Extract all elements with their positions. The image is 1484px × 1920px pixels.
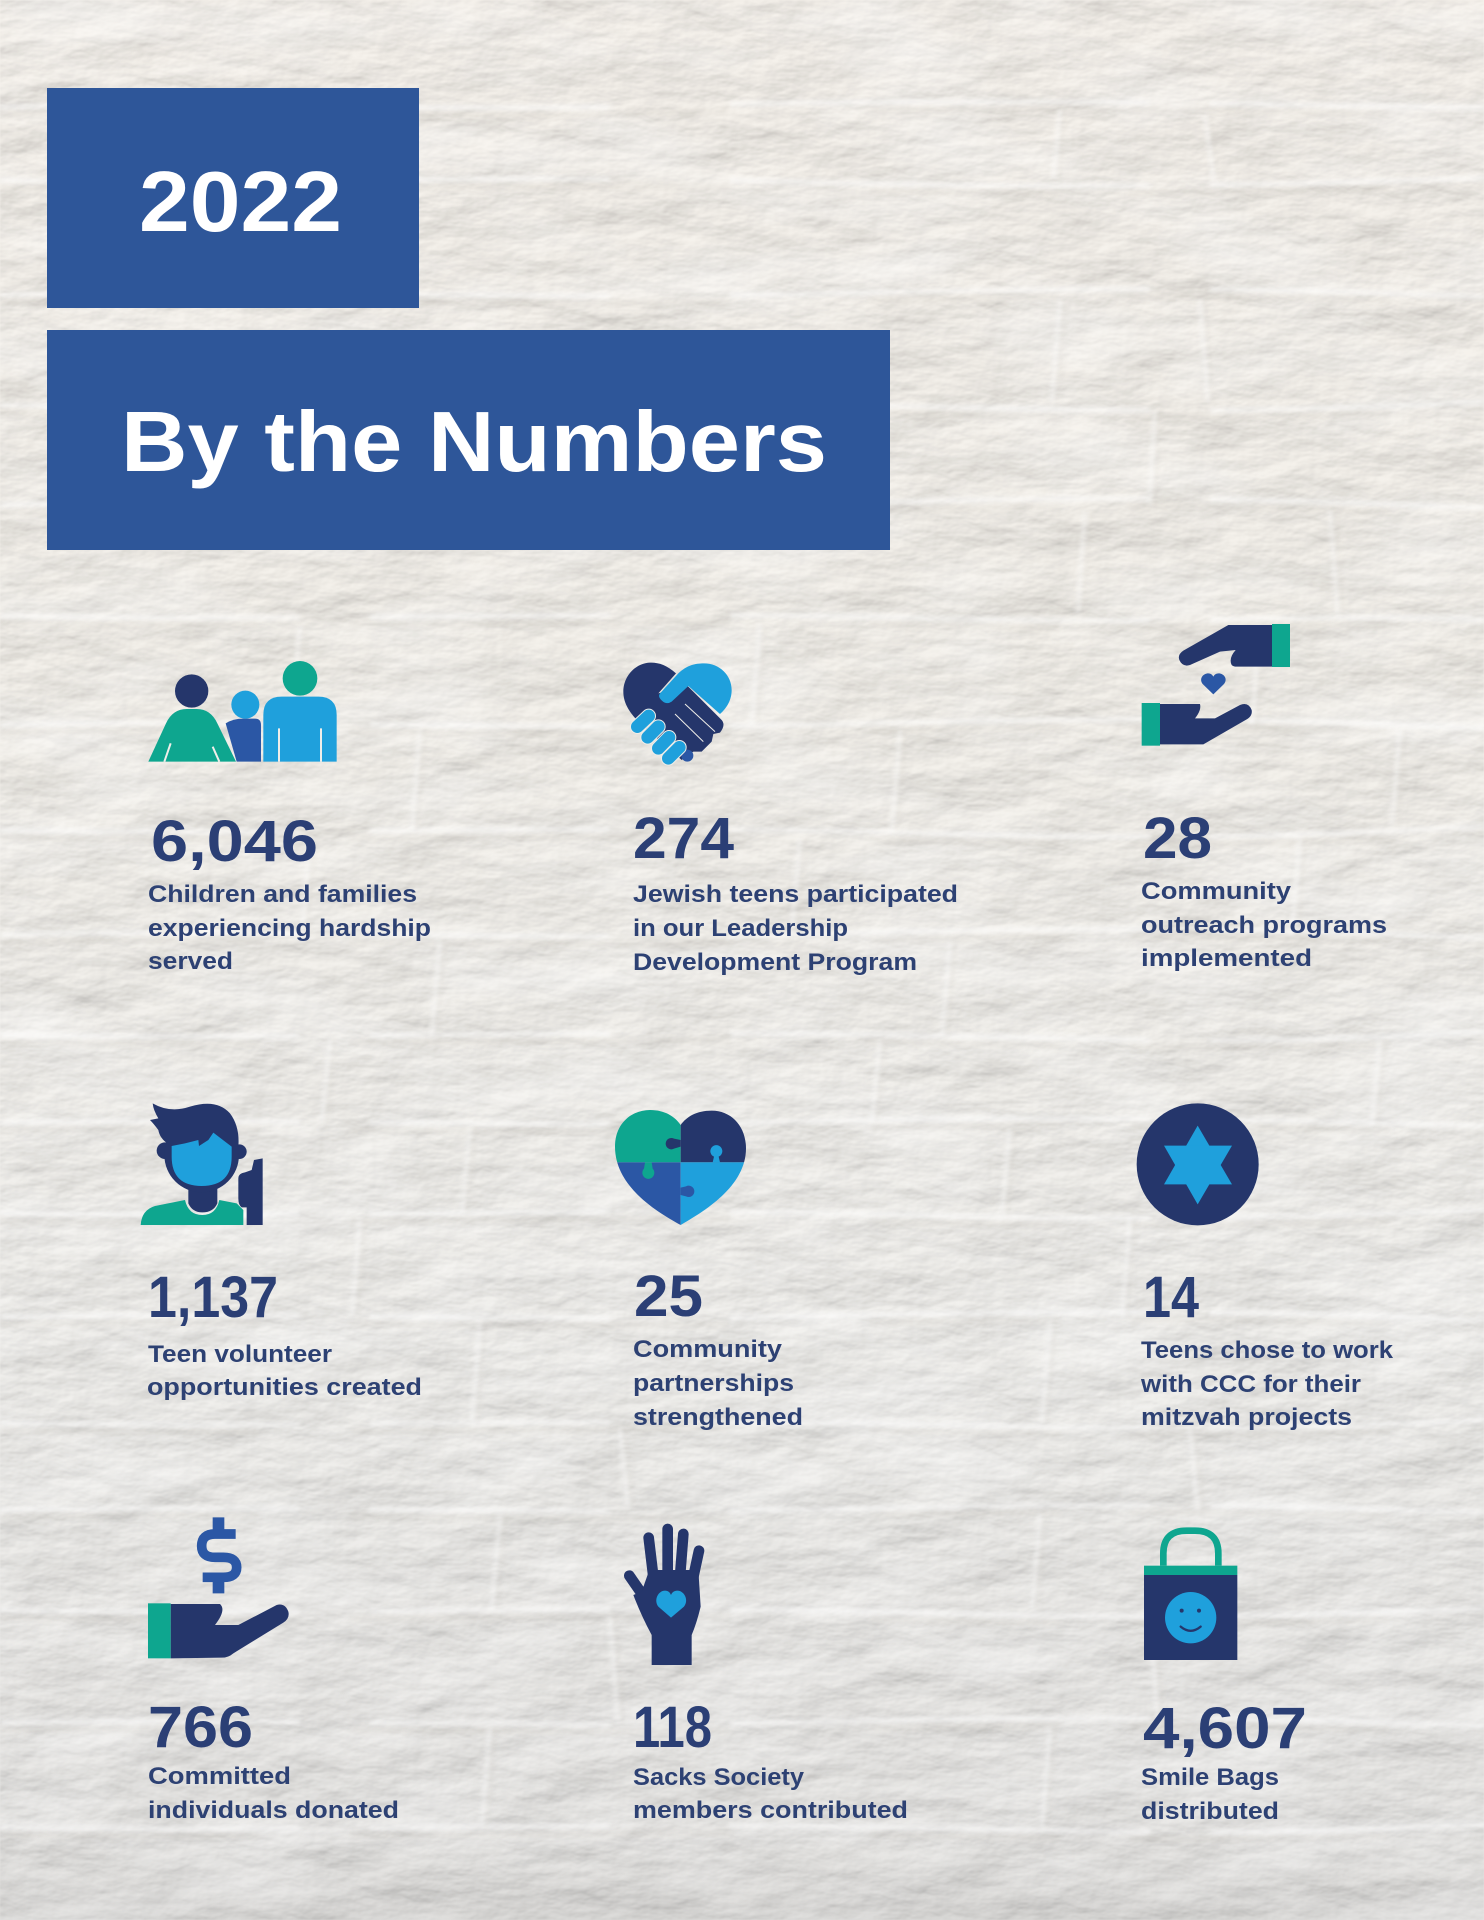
description: Community xyxy=(633,1336,783,1363)
stat: smile bags xyxy=(1141,1531,1307,1825)
number: 6,046: 6,046 xyxy=(151,809,318,874)
description xyxy=(147,1341,422,1401)
title box: 2022: 2022 xyxy=(139,155,342,250)
stat: children and families xyxy=(148,661,431,975)
icon: smile bag xyxy=(1144,1531,1237,1660)
description: members contributed xyxy=(633,1797,908,1824)
description: Smile Bags xyxy=(1141,1764,1279,1791)
stat: sacks society xyxy=(629,1529,908,1824)
description xyxy=(1141,1764,1279,1825)
description xyxy=(1140,1337,1394,1431)
description xyxy=(148,881,431,975)
stat: jewish teens xyxy=(623,663,958,976)
stat: donors xyxy=(148,1517,399,1824)
description xyxy=(1141,878,1387,972)
description: Children and families xyxy=(148,881,417,908)
stat: community partnerships xyxy=(615,1110,802,1430)
description xyxy=(148,1763,399,1824)
icon: star of david xyxy=(1137,1103,1259,1225)
description: Sacks Society xyxy=(633,1764,805,1791)
stat: teen volunteer xyxy=(141,1103,422,1401)
title box: By the Numbers: By the Numbers xyxy=(121,395,827,490)
description: distributed xyxy=(1141,1798,1279,1825)
description: Committed xyxy=(148,1763,291,1790)
icon: hand with dollar sign xyxy=(148,1517,289,1658)
icon: giving hands with heart xyxy=(1142,624,1290,746)
description: opportunities created xyxy=(147,1374,422,1401)
icon: handshake heart xyxy=(623,663,732,762)
description: in our Leadership xyxy=(633,915,848,942)
title box: 2022 xyxy=(47,88,419,308)
description: Jewish teens participated xyxy=(633,881,958,908)
icon: puzzle heart xyxy=(615,1110,746,1225)
description: outreach programs xyxy=(1141,912,1387,939)
description: Community xyxy=(1141,878,1292,905)
description: partnerships xyxy=(633,1370,794,1397)
stat: community outreach xyxy=(1141,624,1387,972)
description: experiencing hardship xyxy=(148,915,431,942)
description: served xyxy=(148,948,233,975)
description: Teen volunteer xyxy=(148,1341,332,1368)
description: implemented xyxy=(1141,945,1312,972)
number: 4,607: 4,607 xyxy=(1143,1696,1307,1761)
title box: By the Numbers xyxy=(47,330,890,550)
description: individuals donated xyxy=(148,1797,399,1824)
number: 1,137: 1,137 xyxy=(148,1265,278,1330)
stat: mitzvah projects xyxy=(1137,1103,1394,1431)
description: Teens chose to work xyxy=(1141,1337,1394,1364)
icon: raised hand with heart xyxy=(629,1529,701,1665)
description: strengthened xyxy=(633,1404,803,1431)
icon: family xyxy=(148,661,337,762)
description xyxy=(633,881,958,976)
number: 25: 25 xyxy=(634,1264,703,1329)
number: 14: 14 xyxy=(1143,1265,1199,1330)
number: 766: 766 xyxy=(148,1695,253,1760)
number: 28: 28 xyxy=(1143,806,1212,871)
icon: teen with thumbs up xyxy=(141,1103,263,1225)
description xyxy=(633,1764,908,1824)
description: with CCC for their xyxy=(1140,1371,1361,1398)
description xyxy=(633,1336,803,1431)
description: mitzvah projects xyxy=(1141,1404,1352,1431)
description: Development Program xyxy=(633,949,917,976)
number: 118: 118 xyxy=(633,1695,712,1760)
number: 274: 274 xyxy=(633,806,734,871)
